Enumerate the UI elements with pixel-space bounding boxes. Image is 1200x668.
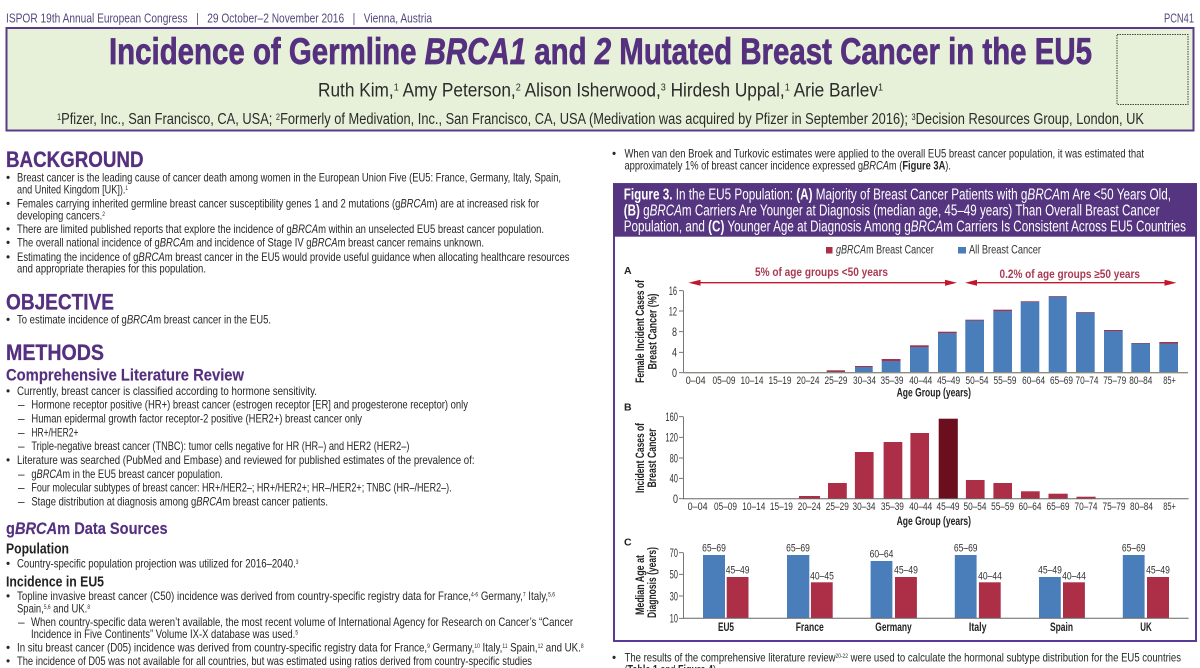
background bullets: • <box>6 196 10 210</box>
literature review bullets: HR+/HER2+ <box>31 426 78 440</box>
group: EU5 <box>702 543 749 634</box>
arrow: under 50 years: 5% of age groups <50 years <box>755 267 888 279</box>
chart B: incident cases by age group: Age Group (years) <box>897 516 971 528</box>
chart C: median age at diagnosis by country: Median Age at <box>635 555 647 615</box>
chart B: incident cases by age group: 20–24 <box>798 501 821 513</box>
incidence bullets: 10 <box>474 644 480 650</box>
objective bullet: To estimate incidence of gBRCAm breast cancer in the EU5. <box>17 312 271 326</box>
legend <box>826 245 1041 257</box>
background bullets: There are limited published reports that explore the incidence of gBRCAm within an unselected EU5 breast cancer population. <box>17 222 544 236</box>
panel: figure 3 <box>613 184 1197 641</box>
incidence bullets: Italy, <box>480 641 502 655</box>
right column intro bullet: • <box>612 147 616 161</box>
title banner <box>6 28 1194 130</box>
group: EU5: 65–69 <box>702 543 726 555</box>
literature review bullets: – <box>18 481 25 495</box>
background bullets: 2 <box>102 212 106 218</box>
group: Italy: 65–69 <box>954 543 978 555</box>
heading: objective: OBJECTIVE <box>6 289 114 314</box>
background bullets <box>6 171 570 276</box>
group: Italy: 40–44 <box>978 570 1002 582</box>
right column intro bullet <box>612 147 1145 172</box>
subheading: population: Population <box>6 541 69 557</box>
subheading: data sources: gBRCAm Data Sources <box>6 520 168 538</box>
incidence bullets: and UK. <box>51 602 87 616</box>
incidence bullets: 5,6 <box>548 592 556 598</box>
chart A: female incident cases by age group: 40–44 <box>909 375 932 387</box>
incidence bullets: When country-specific data weren’t available, the most recent volume of International Agency for Research on Cancer’s “Cancer <box>31 615 573 629</box>
chart A: female incident cases by age group: 55–59 <box>994 375 1016 387</box>
literature review bullets: Literature was searched (PubMed and Embase) and reviewed for published estimates of the prevalence of: <box>17 453 474 467</box>
authors: 1 <box>394 83 399 94</box>
affiliations: 3 <box>912 112 916 122</box>
chart B: incident cases by age group: Breast Cancer <box>647 428 659 488</box>
chart A: female incident cases by age group: 35–39 <box>880 375 904 387</box>
incidence bullets: 5 <box>295 630 299 636</box>
literature review bullets: Hormone receptor positive (HR+) breast cancer (estrogen receptor [ER] and progesterone receptor) only <box>31 397 468 411</box>
background bullets: The overall national incidence of gBRCAm and incidence of Stage IV gBRCAm breast cancer remains unknown. <box>17 236 484 250</box>
incidence bullets <box>6 589 584 668</box>
background bullets: and United Kingdom [UK]). <box>17 183 157 197</box>
chart B: incident cases by age group: 65–69 <box>1046 501 1070 513</box>
literature review bullets: • <box>6 384 10 398</box>
chart B: incident cases by age group: 80 <box>670 451 678 465</box>
chart A: female incident cases by age group: Breast Cancer (%) <box>648 293 660 370</box>
chart B: incident cases by age group: 160 <box>665 410 678 424</box>
literature review bullets: – <box>18 495 25 509</box>
incidence bullets: Incidence in Five Continents” Volume IX-X database was used. <box>31 627 360 641</box>
right column closing bullet: The results of the comprehensive literature review <box>624 651 885 665</box>
literature review bullets: – <box>18 411 25 425</box>
conference line: ISPOR 19th Annual European Congress | 29 October–2 November 2016 | Vienna, Austria <box>6 11 433 26</box>
chart B: incident cases by age group: 35–39 <box>881 501 904 513</box>
figure heading: Figure 3. In the EU5 Population: (A) Majority of Breast Cancer Patients with gBRCAm Are <50 Years Old, <box>624 186 1171 203</box>
group: UK: 65–69 <box>1122 543 1146 555</box>
group: Germany: 45–49 <box>894 564 918 576</box>
incidence bullets: Italy, <box>526 589 548 603</box>
group: Spain: 45–49 <box>1038 564 1062 576</box>
chart A: female incident cases by age group: 85+ <box>1163 375 1176 387</box>
section: background <box>6 147 570 276</box>
authors: 2 <box>516 83 521 94</box>
chart B: incident cases by age group <box>624 402 1189 528</box>
group: UK <box>1122 543 1170 634</box>
group: UK: UK <box>1140 622 1152 634</box>
chart A: female incident cases by age group: A <box>624 265 632 277</box>
chart C: median age at diagnosis by country: C <box>624 536 632 548</box>
group: Germany <box>870 548 918 634</box>
chart A: female incident cases by age group: 05–09 <box>712 375 736 387</box>
chart B: incident cases by age group: 60–64 <box>1018 501 1042 513</box>
chart B: incident cases by age group: 85+ <box>1163 501 1176 513</box>
group: France: 40–45 <box>810 570 834 582</box>
chart A: female incident cases by age group: 4 <box>672 346 677 360</box>
chart A: female incident cases by age group: 0–04 <box>686 375 706 387</box>
background bullets: • <box>6 250 10 264</box>
chart A: female incident cases by age group: 10–14 <box>740 375 764 387</box>
authors: 3 <box>661 83 666 94</box>
chart B: incident cases by age group: 75–79 <box>1102 501 1126 513</box>
title: Incidence of Germline BRCA1 and 2 Mutated Breast Cancer in the EU5 <box>109 31 1092 72</box>
chart C: median age at diagnosis by country: 10 <box>670 612 678 626</box>
literature review bullets: Four molecular subtypes of breast cancer: HR+/HER2–; HR+/HER2+; HR–/HER2+; TNBC (HR–/HER2–). <box>31 481 452 495</box>
chart B: incident cases by age group: 40 <box>670 472 678 486</box>
group: France <box>786 543 834 634</box>
section: objective <box>6 289 271 326</box>
heading: methods: METHODS <box>6 340 104 365</box>
group: Germany: Germany <box>875 622 912 634</box>
QR code placeholder <box>1117 34 1188 104</box>
chart A: female incident cases by age group: 16 <box>669 284 677 298</box>
authors: 1 <box>785 83 790 94</box>
incidence bullets: 7 <box>523 592 526 598</box>
chart A: female incident cases by age group: 45–49 <box>937 375 960 387</box>
chart A: female incident cases by age group: 0 <box>672 366 677 380</box>
chart C: median age at diagnosis by country <box>624 536 1189 634</box>
population bullet: 3 <box>296 560 299 566</box>
background bullets: Breast cancer is the leading cause of cancer death among women in the European Union Five (EU5: France, Germany, Italy, Spain, <box>17 171 561 185</box>
background bullets: developing cancers. <box>17 209 122 223</box>
authors: Ruth Kim, <box>318 81 401 102</box>
chart A: female incident cases by age group <box>624 265 1188 400</box>
incidence bullets: Spain, <box>17 602 50 616</box>
group: Italy: Italy <box>969 622 987 634</box>
chart A: female incident cases by age group: Female Incident Cases of <box>635 280 647 383</box>
chart A: female incident cases by age group: 8 <box>672 325 677 339</box>
chart A: female incident cases by age group: 30–34 <box>853 375 876 387</box>
chart A: female incident cases by age group: Age Group (years) <box>897 388 971 400</box>
incidence bullets: The incidence of D05 was not available for all countries, but was estimated using ratios derived from country-specific studies <box>17 654 532 668</box>
chart B: incident cases by age group: 15–19 <box>770 501 793 513</box>
incidence bullets: 9 <box>427 644 430 650</box>
group: EU5: EU5 <box>718 622 734 634</box>
literature review bullets: – <box>18 467 25 481</box>
group: Spain: Spain <box>1050 622 1073 634</box>
chart A: female incident cases by age group: 20–24 <box>796 375 820 387</box>
literature review bullets: – <box>18 397 25 411</box>
heading: background: BACKGROUND <box>6 147 144 172</box>
chart B: incident cases by age group: 70–74 <box>1074 501 1098 513</box>
arrow: 50 years and over: 0.2% of age groups ≥50 years <box>1000 269 1140 281</box>
right column intro bullet: approximately 1% of breast cancer incidence expressed gBRCAm (Figure 3A). <box>624 158 951 172</box>
incidence bullets: 8 <box>581 644 584 650</box>
chart B: incident cases by age group: 80–84 <box>1130 501 1153 513</box>
background bullets: 1 <box>125 186 129 192</box>
authors: Amy Peterson, <box>399 81 516 102</box>
affiliations: Decision Resources Group, London, UK <box>916 111 1145 128</box>
chart A: female incident cases by age group: 65–69 <box>1050 375 1073 387</box>
chart B: incident cases by age group: 0 <box>673 492 678 506</box>
chart B: incident cases by age group: 40–44 <box>909 501 932 513</box>
chart B: incident cases by age group: 50–54 <box>964 501 986 513</box>
incidence bullets: • <box>6 654 10 668</box>
chart B: incident cases by age group: 0–04 <box>688 501 708 513</box>
literature review bullets: – <box>18 439 25 453</box>
background bullets: Females carrying inherited germline breast cancer susceptibility genes 1 and 2 mutations (gBRCAm) are at increased risk for <box>17 196 539 210</box>
group: Italy <box>954 543 1002 634</box>
authors: Hirdesh Uppal, <box>666 81 785 102</box>
incidence bullets: Germany, <box>478 589 523 603</box>
chart A: female incident cases by age group: 25–29 <box>824 375 848 387</box>
literature review bullets: – <box>18 426 25 440</box>
chart C: median age at diagnosis by country: Diagnosis (years) <box>647 547 659 618</box>
incidence bullets: 5,6 <box>44 605 51 611</box>
group: Germany: 60–64 <box>870 548 893 560</box>
group: Spain: 40–44 <box>1062 570 1086 582</box>
affiliations: 1 <box>57 112 61 122</box>
group: UK: 45–49 <box>1146 564 1170 576</box>
incidence bullets: In situ breast cancer (D05) incidence was derived from country-specific registry data for France, <box>17 641 516 655</box>
affiliations: Formerly of Medivation, Inc., San Francisco, CA, USA (Medivation was acquired by Pfizer in September 2016); <box>280 111 912 128</box>
group: France: France <box>796 622 824 634</box>
chart B: incident cases by age group: 05–09 <box>714 501 737 513</box>
subheading: incidence in EU5: Incidence in EU5 <box>6 575 104 591</box>
chart A: female incident cases by age group: 60–64 <box>1022 375 1045 387</box>
population bullet: • <box>6 556 10 570</box>
chart B: incident cases by age group: 45–49 <box>936 501 960 513</box>
background bullets: • <box>6 236 10 250</box>
incidence bullets: Germany, <box>430 641 474 655</box>
affiliations: 2 <box>276 112 280 122</box>
figure heading <box>613 184 1197 237</box>
legend: gBRCAm Breast Cancer <box>836 245 934 257</box>
literature review bullets: • <box>6 453 10 467</box>
group: Spain <box>1038 564 1086 634</box>
legend: All Breast Cancer <box>969 245 1041 257</box>
population bullet: Country-specific population projection was utilized for 2016–2040. <box>17 556 361 570</box>
affiliations: Pfizer, Inc., San Francisco, CA, USA; <box>61 111 276 128</box>
incidence bullets: and UK. <box>543 641 581 655</box>
chart A: female incident cases by age group: 50–54 <box>966 375 988 387</box>
chart A: female incident cases by age group: 80–84 <box>1129 375 1152 387</box>
objective bullet: • <box>6 312 10 326</box>
group: EU5: 45–49 <box>726 564 749 576</box>
chart B: incident cases by age group: 25–29 <box>826 501 849 513</box>
right column closing bullet: 20-22 <box>836 654 848 660</box>
arrow: under 50 years <box>688 267 957 286</box>
authors: Arie Barlev <box>790 81 878 102</box>
authors: Alison Isherwood, <box>521 81 661 102</box>
chart B: incident cases by age group: B <box>624 402 632 414</box>
background bullets: and appropriate therapies for this population. <box>17 262 206 276</box>
incidence bullets: 12 <box>538 644 544 650</box>
chart A: female incident cases by age group: 70–74 <box>1076 375 1098 387</box>
incidence bullets: – <box>18 615 25 629</box>
chart B: incident cases by age group: 10–14 <box>742 501 765 513</box>
chart A: female incident cases by age group: 15–19 <box>768 375 792 387</box>
chart A: female incident cases by age group: 12 <box>669 304 677 318</box>
incidence bullets: • <box>6 589 10 603</box>
incidence bullets: 11 <box>502 644 508 650</box>
section: methods <box>6 340 584 668</box>
chart B: incident cases by age group: Incident Cases of <box>635 423 647 493</box>
incidence bullets: • <box>6 641 10 655</box>
chart B: incident cases by age group: 120 <box>665 430 678 444</box>
right column closing bullet: • <box>612 651 616 665</box>
chart B: incident cases by age group: 30–34 <box>852 501 876 513</box>
literature review bullets: gBRCAm in the EU5 breast cancer population. <box>31 467 223 481</box>
chart A: female incident cases by age group: 75–79 <box>1103 375 1126 387</box>
subheading: literature review: Comprehensive Literature Review <box>6 367 244 385</box>
chart B: incident cases by age group: 55–59 <box>991 501 1014 513</box>
literature review bullets: Human epidermal growth factor receptor-2 positive (HER2+) breast cancer only <box>31 411 362 425</box>
chart C: median age at diagnosis by country: 50 <box>670 568 678 582</box>
right column closing bullet <box>612 651 1181 668</box>
chart C: median age at diagnosis by country: 30 <box>670 589 678 603</box>
incidence bullets: Spain, <box>507 641 538 655</box>
literature review bullets: Currently, breast cancer is classified according to hormone sensitivity. <box>17 384 317 398</box>
incidence bullets: Topline invasive breast cancer (C50) incidence was derived from country-specific registry data for France, <box>17 589 568 603</box>
incidence bullets: 4-6 <box>471 592 479 598</box>
literature review bullets: Stage distribution at diagnosis among gBRCAm breast cancer patients. <box>31 495 328 509</box>
background bullets: • <box>6 222 10 236</box>
background bullets: Estimating the incidence of gBRCAm breast cancer in the EU5 would provide useful guidance when allocating healthcare resources <box>17 250 570 264</box>
literature review bullets <box>6 384 474 509</box>
arrow: 50 years and over <box>965 269 1176 286</box>
authors: 1 <box>878 83 883 94</box>
chart C: median age at diagnosis by country: 70 <box>670 546 678 560</box>
literature review bullets: Triple-negative breast cancer (TNBC): tumor cells negative for HR (HR–) and HER2 (HER2–) <box>31 439 409 453</box>
group: France: 65–69 <box>786 543 810 555</box>
background bullets: • <box>6 171 10 185</box>
incidence bullets: 8 <box>87 605 91 611</box>
